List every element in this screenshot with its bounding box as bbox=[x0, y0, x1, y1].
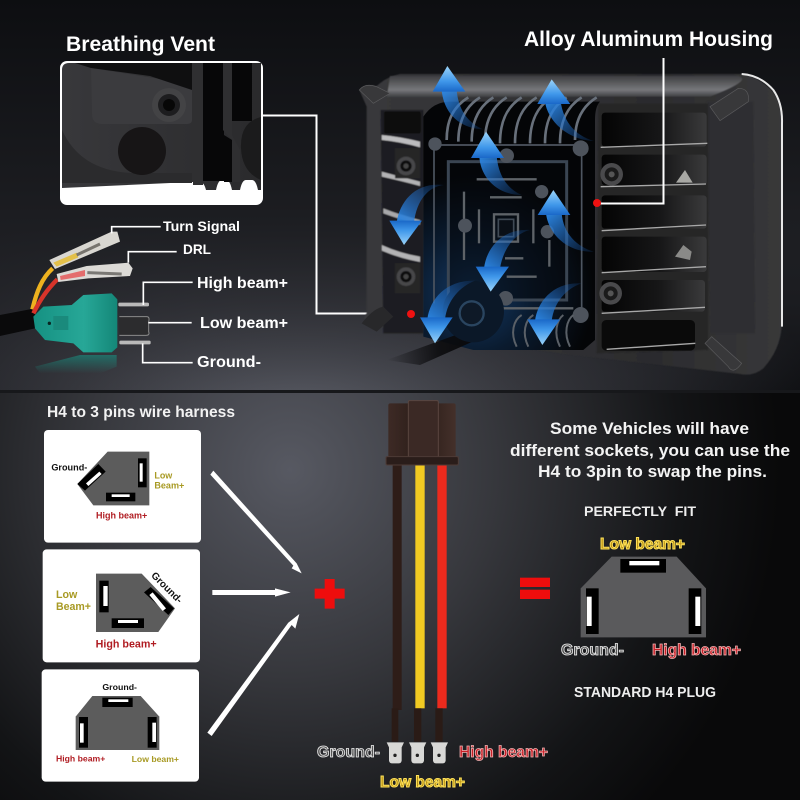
arrow: card 1 to plus bbox=[210, 471, 302, 573]
standard H4 plug diagram bbox=[581, 557, 706, 637]
card 3: High beam+ bbox=[56, 753, 105, 763]
text block: sockets explanation: different sockets, you can use the bbox=[510, 441, 790, 460]
equals sign bbox=[520, 578, 550, 599]
card 3: Low beam+ bbox=[132, 754, 179, 764]
plug label: Low beam+: Low beam+ bbox=[600, 536, 685, 553]
card 3: Ground- bbox=[102, 682, 137, 692]
airflow arrow 5 bbox=[389, 185, 444, 245]
black cable bbox=[0, 308, 35, 336]
heading: Alloy Aluminum Housing: Alloy Aluminum Housing bbox=[524, 28, 773, 51]
pin terminals bbox=[387, 742, 448, 763]
heading: H4 to 3 pins wire harness: H4 to 3 pins wire harness bbox=[47, 404, 235, 421]
card 1: Ground- bbox=[51, 463, 87, 473]
center heat sink bbox=[423, 97, 600, 350]
red wire bbox=[33, 279, 57, 313]
card 1: Low bbox=[154, 470, 172, 480]
airflow arrow 2 bbox=[537, 79, 594, 141]
text block: sockets explanation bbox=[510, 419, 790, 481]
socket plug bbox=[386, 401, 458, 465]
airflow arrow 1 bbox=[433, 66, 483, 129]
leader line: vent to lamp bbox=[263, 116, 411, 314]
plug label: Ground-: Ground- bbox=[561, 642, 624, 659]
marker: vent point bbox=[407, 310, 415, 318]
card 2 bbox=[43, 549, 200, 662]
arrow: card 2 to plus bbox=[212, 588, 291, 597]
leader line: housing callout bbox=[597, 58, 664, 204]
label: Low beam+: Low beam+ bbox=[200, 315, 288, 332]
leader lines bbox=[112, 227, 193, 363]
plus sign bbox=[315, 579, 345, 609]
card 3 bbox=[42, 669, 199, 782]
icon: hex screw bbox=[152, 88, 186, 122]
arrow: card 3 to plus bbox=[207, 614, 299, 736]
plug label: High beam+: High beam+ bbox=[652, 642, 741, 659]
card 2: Low bbox=[56, 589, 78, 601]
harness label: High beam+: High beam+ bbox=[459, 744, 548, 761]
card 2: High beam+ bbox=[96, 639, 157, 651]
icon: vent membrane bbox=[118, 127, 166, 175]
adapter harness bbox=[386, 401, 706, 763]
airflow arrow 3 bbox=[471, 132, 522, 195]
airflow arrow 7 bbox=[420, 281, 475, 343]
DRL terminal bbox=[57, 263, 133, 282]
label: High beam+: High beam+ bbox=[197, 275, 288, 292]
reflection bbox=[35, 355, 117, 373]
label: Turn Signal: Turn Signal bbox=[163, 218, 240, 234]
right fin block bbox=[597, 103, 708, 353]
pins bbox=[118, 303, 151, 344]
socket cards and arrows bbox=[42, 430, 345, 782]
airflow arrow 8 bbox=[527, 283, 582, 345]
wire: low beam bbox=[414, 465, 425, 742]
yellow wire bbox=[32, 268, 53, 309]
harness label: Ground-: Ground- bbox=[317, 744, 380, 761]
lamp photo with airflow arrows bbox=[359, 66, 782, 375]
corner mounting tabs bbox=[359, 85, 749, 370]
turn signal terminal bbox=[49, 232, 120, 269]
card 2: Ground- bbox=[149, 570, 184, 606]
label: DRL: DRL bbox=[183, 241, 211, 257]
text block: sockets explanation: H4 to 3pin to swap the pins. bbox=[538, 462, 767, 481]
heading: Breathing Vent: Breathing Vent bbox=[66, 33, 215, 56]
power cable bbox=[387, 281, 504, 365]
label: Ground-: Ground- bbox=[197, 354, 261, 371]
card 1 bbox=[44, 430, 201, 543]
lamp housing body bbox=[359, 74, 782, 375]
background: upper panel bbox=[0, 0, 800, 391]
teal plug bbox=[33, 293, 117, 352]
wire: ground bbox=[392, 465, 402, 742]
card 1: Beam+ bbox=[154, 480, 184, 490]
airflow arrow 6 bbox=[476, 230, 530, 292]
marker: housing point bbox=[593, 199, 601, 207]
background: lower panel bbox=[0, 391, 800, 800]
harness label: Low beam+: Low beam+ bbox=[380, 774, 465, 791]
card 1: High beam+ bbox=[96, 510, 147, 520]
airflow arrow 4 bbox=[538, 190, 594, 252]
wire: high beam bbox=[435, 465, 447, 742]
left fin block bbox=[381, 110, 423, 333]
text block: sockets explanation: Some Vehicles will have bbox=[550, 419, 749, 438]
card 2: Beam+ bbox=[56, 601, 91, 613]
label: STANDARD H4 PLUG: STANDARD H4 PLUG bbox=[574, 685, 716, 701]
connector with pin labels bbox=[0, 227, 193, 373]
label: PERFECTLY FIT: PERFECTLY FIT bbox=[584, 504, 697, 519]
panel: breathing vent close-up photo bbox=[60, 61, 263, 205]
